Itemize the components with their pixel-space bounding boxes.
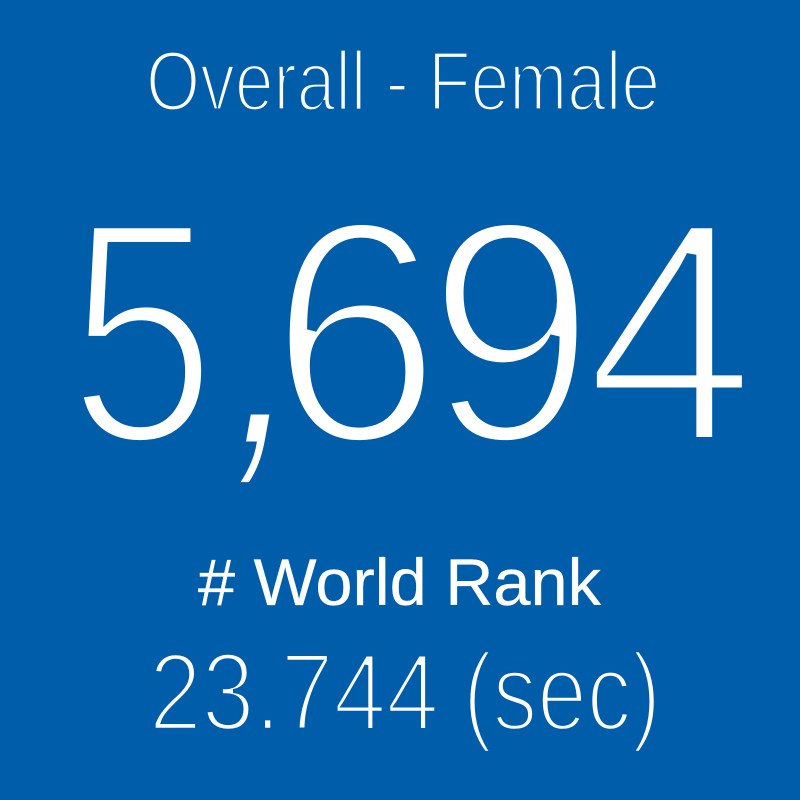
label: world rank: # World Rank: [198, 545, 602, 619]
big number: world rank value: ,: [207, 157, 340, 513]
time value: 23.744: [149, 631, 439, 754]
time value: [149, 631, 661, 754]
big number: world rank value: 5: [68, 155, 217, 510]
big number: world rank value: 6: [269, 154, 442, 510]
time value: (sec): [463, 631, 661, 754]
big number: world rank value: 9: [427, 154, 596, 510]
title: Overall - Female: [146, 34, 660, 128]
big number: world rank value: [68, 154, 756, 513]
big number: world rank value: 4: [585, 155, 756, 510]
